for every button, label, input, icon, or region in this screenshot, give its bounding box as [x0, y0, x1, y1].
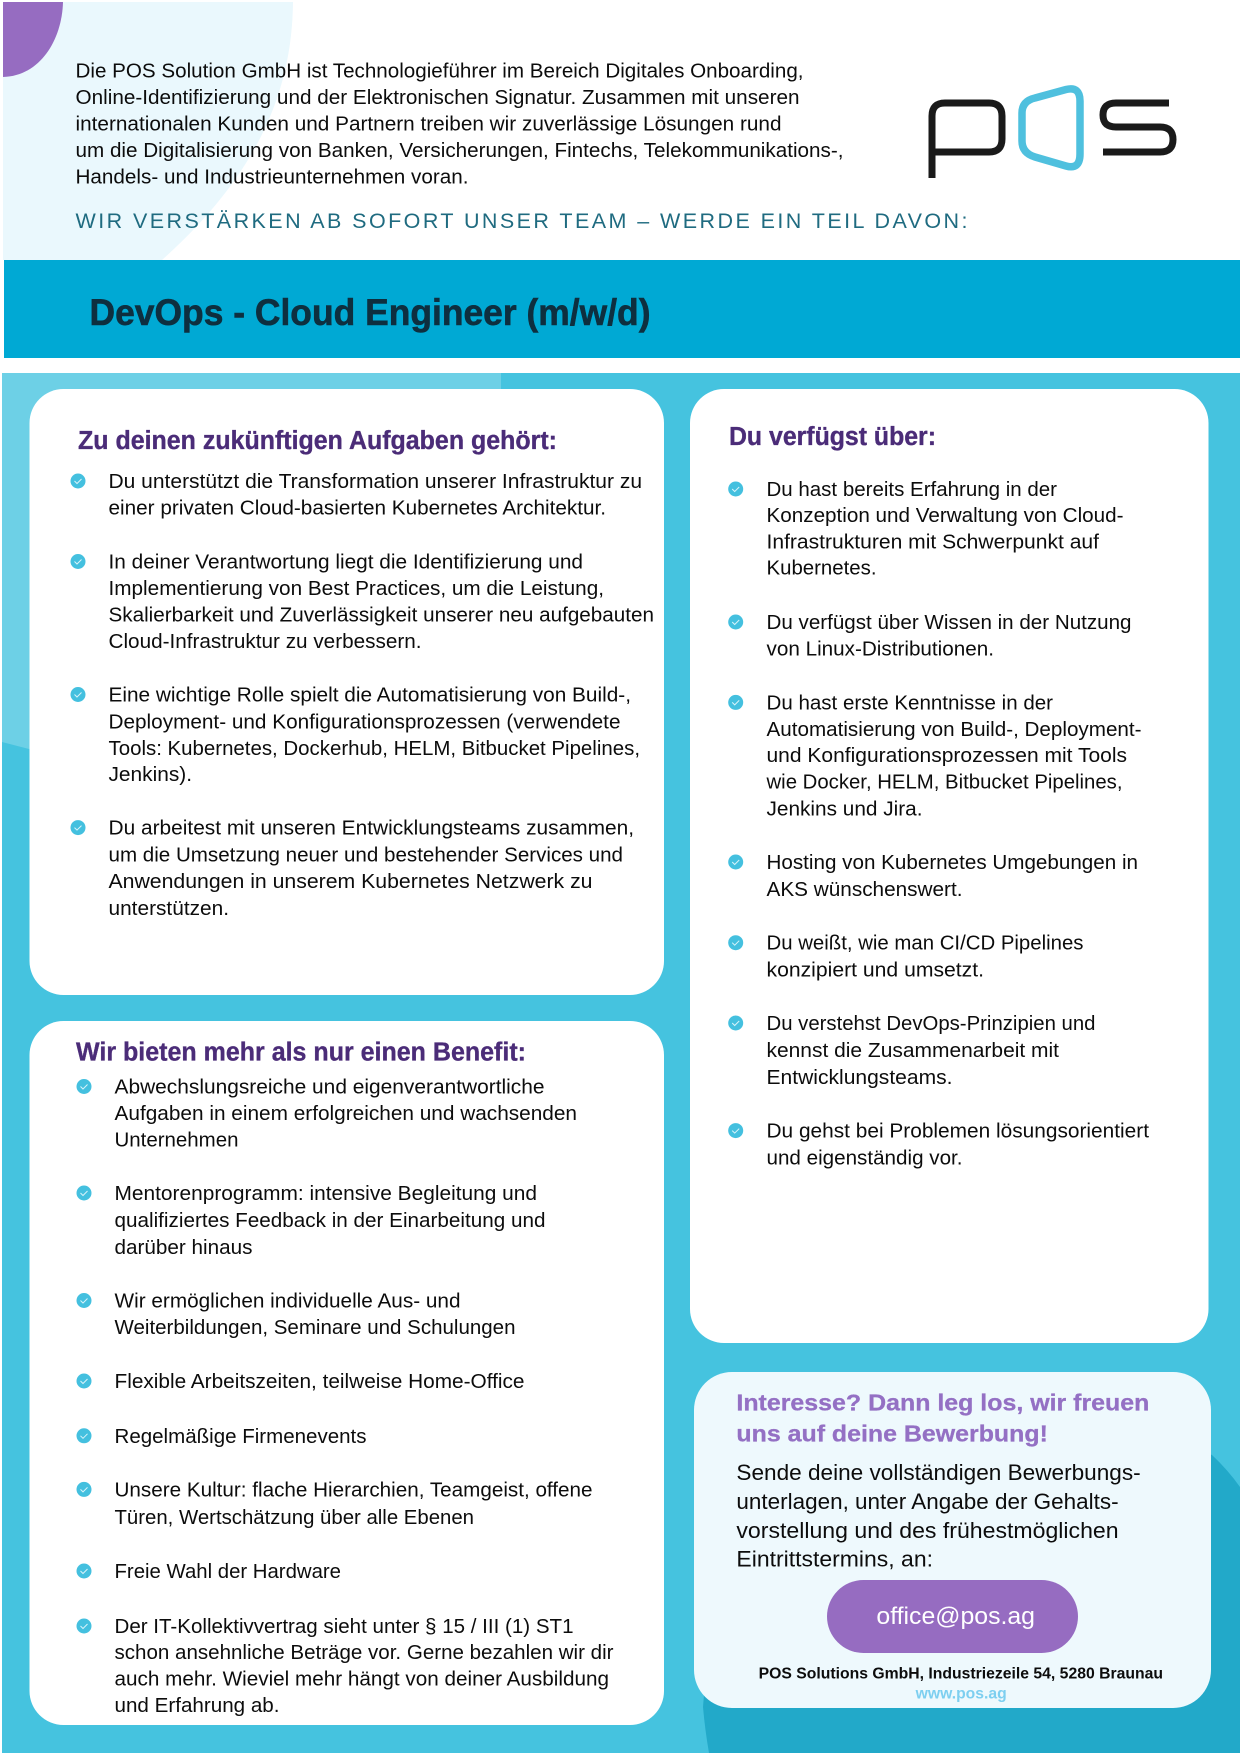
list item: Regelmäßige Firmenevents — [114, 1426, 366, 1448]
list item: Flexible Arbeitszeiten, teilweise Home-Office — [114, 1371, 524, 1393]
intro text: um die Digitalisierung von Banken, Versicherungen, Fintechs, Telekommunikations-, — [76, 140, 844, 162]
list item: auch mehr. Wieviel mehr hängt von deiner Ausbildung — [114, 1668, 609, 1690]
intro text: Online-Identifizierung und der Elektronischen Signatur. Zusammen mit unseren — [76, 87, 800, 109]
list item: kennst die Zusammenarbeit mit — [766, 1040, 1059, 1062]
list item: Deployment- und Konfigurationsprozessen (verwendete — [108, 711, 620, 733]
panel: requirements — [690, 389, 1208, 1343]
application instructions: Eintrittstermins, an: — [736, 1547, 933, 1572]
panel: application call to action — [694, 1372, 1211, 1708]
job title: DevOps - Cloud Engineer (m/w/d) — [90, 292, 650, 333]
application instructions: Sende deine vollständigen Bewerbungs- — [736, 1460, 1141, 1485]
darker background shape — [703, 1400, 1240, 1753]
panel: tasks — [30, 389, 664, 995]
list item: konzipiert und umsetzt. — [766, 960, 984, 982]
heading: call to action — [736, 1390, 1149, 1447]
title band — [4, 260, 1240, 358]
list item — [70, 684, 640, 786]
list item: wie Docker, HELM, Bitbucket Pipelines, — [765, 772, 1122, 794]
website: www.pos.ag — [915, 1686, 1007, 1703]
list item: um die Umsetzung neuer und bestehender Services und — [108, 844, 623, 866]
list item — [728, 479, 1124, 580]
heading: call to action: uns auf deine Bewerbung! — [736, 1421, 1048, 1447]
list item — [76, 1290, 516, 1339]
list item — [76, 1076, 577, 1152]
list item: Du hast erste Kenntnisse in der — [766, 692, 1053, 714]
email button — [827, 1580, 1078, 1653]
intro text: Die POS Solution GmbH ist Technologieführer im Bereich Digitales Onboarding, — [76, 60, 803, 82]
application instructions: vorstellung und des frühestmöglichen — [736, 1518, 1119, 1543]
list item: Mentorenprogramm: intensive Begleitung und — [114, 1183, 537, 1205]
panel: benefits — [30, 1021, 664, 1725]
list item: Weiterbildungen, Seminare und Schulungen — [114, 1317, 516, 1339]
list item: Wir ermöglichen individuelle Aus- und — [114, 1290, 461, 1312]
list item: Hosting von Kubernetes Umgebungen in — [766, 852, 1138, 874]
list item: AKS wünschenswert. — [766, 879, 962, 901]
list item: Du weißt, wie man CI/CD Pipelines — [766, 933, 1084, 955]
list item: Türen, Wertschätzung über alle Ebenen — [114, 1507, 474, 1529]
list item — [728, 933, 1084, 982]
POS logo — [932, 89, 1173, 178]
main background — [2, 373, 1240, 1753]
list item: Konzeption und Verwaltung von Cloud- — [766, 505, 1124, 527]
intro text: internationalen Kunden und Partnern treiben wir zuverlässige Lösungen rund — [76, 114, 782, 136]
list item: und Konfigurationsprozessen mit Tools — [766, 745, 1127, 767]
list item: Anwendungen in unserem Kubernetes Netzwerk zu — [108, 871, 592, 893]
company address: POS Solutions GmbH, Industriezeile 54, 5280 Braunau — [759, 1666, 1163, 1683]
list item: Du unterstützt die Transformation unserer Infrastruktur zu — [108, 471, 642, 493]
list item: Jenkins und Jira. — [766, 799, 922, 821]
heading: tasks: Zu deinen zukünftigen Aufgaben gehört: — [78, 427, 557, 455]
list item: Aufgaben in einem erfolgreichen und wachsenden — [114, 1103, 577, 1125]
intro text — [76, 60, 844, 188]
list item: und Erfahrung ab. — [114, 1695, 280, 1717]
list item: In deiner Verantwortung liegt die Identifizierung und — [108, 552, 583, 574]
heading: benefits: Wir bieten mehr als nur einen Benefit: — [76, 1039, 526, 1067]
list item — [728, 1013, 1096, 1089]
list item: Kubernetes. — [766, 558, 876, 580]
list item: Abwechslungsreiche und eigenverantwortliche — [114, 1076, 544, 1098]
list item: Implementierung von Best Practices, um die Leistung, — [108, 578, 604, 600]
list item: Cloud-Infrastruktur zu verbessern. — [108, 631, 421, 653]
tagline: WIR VERSTÄRKEN AB SOFORT UNSER TEAM – WERDE EIN TEIL DAVON: — [76, 209, 968, 233]
list item: Der IT-Kollektivvertrag sieht unter § 15 / III (1) ST1 — [114, 1616, 574, 1638]
list item: Skalierbarkeit und Zuverlässigkeit unserer neu aufgebauten — [108, 604, 654, 626]
list item: einer privaten Cloud-basierten Kubernetes Architektur. — [108, 498, 606, 520]
list item: darüber hinaus — [114, 1237, 252, 1259]
list item: Unternehmen — [114, 1130, 238, 1152]
list item — [70, 552, 654, 653]
list item — [76, 1616, 614, 1717]
list item: Du verstehst DevOps-Prinzipien und — [766, 1013, 1096, 1035]
list item — [76, 1183, 546, 1259]
list item: Jenkins). — [108, 764, 192, 786]
intro text: Handels- und Industrieunternehmen voran. — [76, 166, 468, 188]
application instructions: unterlagen, unter Angabe der Gehalts- — [736, 1489, 1119, 1514]
heading: requirements: Du verfügst über: — [729, 423, 936, 451]
list item: Infrastrukturen mit Schwerpunkt auf — [766, 531, 1099, 553]
list item — [728, 852, 1138, 901]
list item: Unsere Kultur: flache Hierarchien, Teamgeist, offene — [114, 1479, 592, 1501]
list item: Du gehst bei Problemen lösungsorientiert — [766, 1121, 1149, 1143]
list item: Du verfügst über Wissen in der Nutzung — [766, 612, 1132, 634]
list item: Eine wichtige Rolle spielt die Automatisierung von Build-, — [108, 684, 631, 706]
list item: Freie Wahl der Hardware — [114, 1561, 341, 1583]
list item: Du arbeitest mit unseren Entwicklungsteams zusammen, — [108, 818, 634, 840]
list item: von Linux-Distributionen. — [766, 639, 994, 661]
lighter background shape — [2, 373, 501, 749]
application instructions — [736, 1460, 1141, 1572]
list item: Tools: Kubernetes, Dockerhub, HELM, Bitbucket Pipelines, — [108, 738, 640, 760]
list item: Entwicklungsteams. — [766, 1067, 952, 1089]
list item — [728, 1121, 1149, 1169]
list item — [70, 471, 642, 520]
heading: call to action: Interesse? Dann leg los, wir freuen — [736, 1390, 1149, 1416]
email button: office@pos.ag — [876, 1603, 1035, 1630]
list item: schon ansehnliche Beträge vor. Gerne bezahlen wir dir — [114, 1642, 614, 1664]
list item — [728, 612, 1132, 661]
list item — [76, 1479, 592, 1529]
list item: qualifiziertes Feedback in der Einarbeitung und — [114, 1210, 546, 1232]
list item: Automatisierung von Build-, Deployment- — [766, 719, 1142, 741]
list item: Du hast bereits Erfahrung in der — [766, 479, 1057, 501]
header background blob — [3, 2, 293, 260]
list item — [728, 692, 1142, 821]
list item: und eigenständig vor. — [766, 1147, 962, 1169]
list item: unterstützen. — [108, 898, 229, 920]
purple corner shape — [3, 2, 63, 77]
list item — [70, 818, 634, 920]
